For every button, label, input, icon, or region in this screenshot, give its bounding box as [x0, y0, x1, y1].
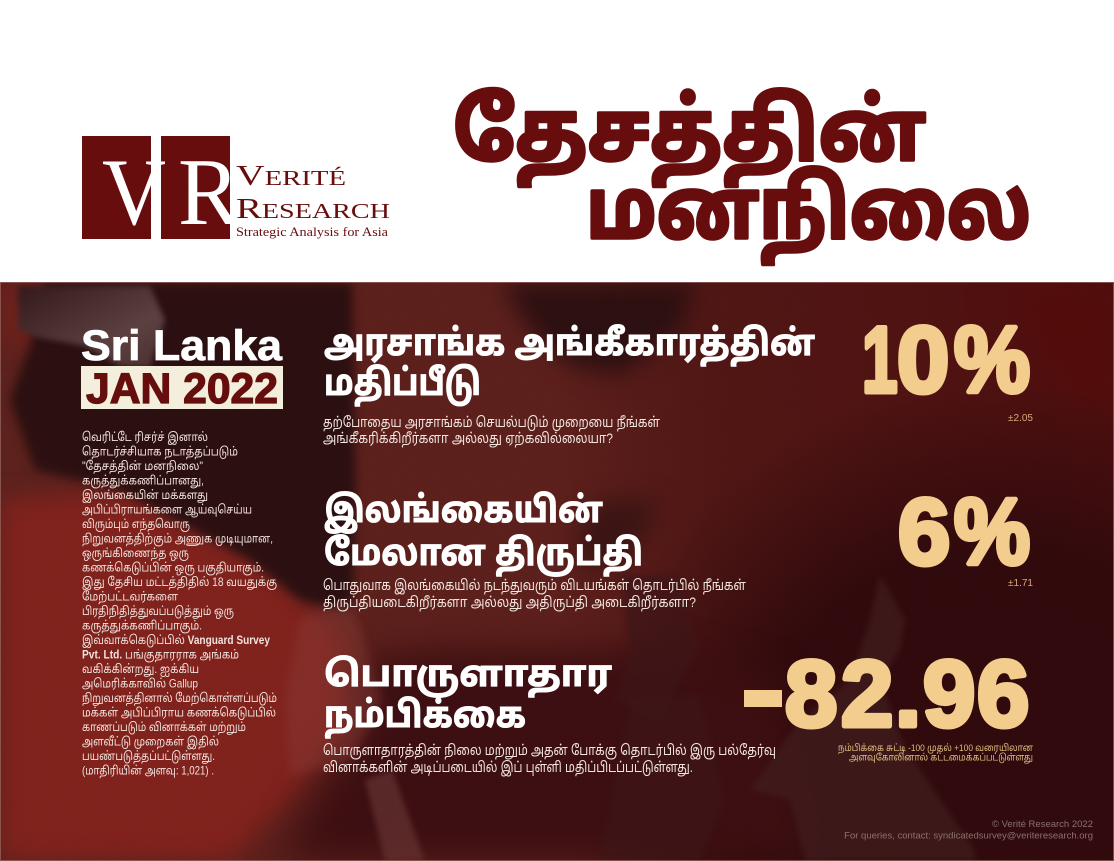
- text block: survey description: கருத்துக்கணிப்பாகும்.: [82, 618, 202, 634]
- heading: approval: [324, 322, 815, 406]
- text block: survey description: நிறுவனத்திற்கும் அணுக முடியுமான,: [82, 532, 273, 546]
- panel: overall satisfaction: [323, 479, 1033, 612]
- question text: approval: அங்கீகரிக்கிறீர்களா அல்லது ஏற்கவில்லையா?: [323, 430, 613, 448]
- heading: satisfaction: இலங்கையின்: [324, 489, 603, 534]
- text block: survey description: விரும்பும் எந்தவொரு: [82, 517, 190, 532]
- question text: approval: [323, 414, 660, 448]
- footer credits: © Verité Research 2022: [992, 819, 1093, 830]
- margin of error: 1.71: ±1.71: [1008, 578, 1033, 589]
- heading: confidence: [324, 653, 612, 739]
- question text: confidence: வினாக்களின் அடிப்படையில் இப் புள்ளி மதிப்பிடப்பட்டுள்ளது.: [323, 759, 693, 777]
- logo: Verité Research: V ERITÉ: [236, 160, 346, 192]
- logo: Verité Research: Strategic Analysis for Asia: [236, 224, 388, 239]
- text block: survey description: மக்கள் அபிப்பிராய கணக்கெடுப்பில்: [82, 706, 276, 720]
- logo: Verité Research: [82, 136, 390, 245]
- statistic: 6%: [898, 479, 1030, 585]
- text block: survey description: (மாதிரியின் அளவு: 1,021) .: [82, 764, 214, 778]
- background photo panel: [0, 282, 1114, 861]
- text block: survey description: நிறுவனத்தினால் மேற்கொள்ளப்படும்: [82, 691, 277, 706]
- statistic: 10%: 0: [897, 307, 949, 412]
- scale note: நம்பிக்கை சுட்டி -100 முதல் +100 வரையிலான: [838, 742, 1033, 754]
- statistic: 10%: [862, 307, 1030, 413]
- scale note: [838, 742, 1033, 764]
- scale note: அளவுகோலினால் கட்டமைக்கப்பட்டுள்ளது: [849, 752, 1033, 764]
- question text: confidence: பொருளாதாரத்தின் நிலை மற்றும் அதன் போக்கு தொடர்பில் இரு பல்தேர்வு: [323, 742, 776, 760]
- statistic: 10%: %: [954, 308, 1030, 413]
- text block: survey description: தொடர்ச்சியாக நடாத்தப்படும்: [82, 444, 238, 460]
- statistic: 10%: 1: [862, 308, 898, 413]
- heading: approval: மதிப்பீடு: [324, 362, 481, 406]
- statistic: 6%: 6: [898, 479, 950, 584]
- logo: Verité Research: R: [178, 139, 241, 245]
- panel: economic confidence: [323, 639, 1033, 777]
- text block: survey description: பிரதிநிதித்துவப்படுத்தும் ஒரு: [82, 604, 234, 619]
- logo: Verité Research: R ESEARCH: [236, 193, 390, 225]
- heading: confidence: பொருளாதார: [324, 653, 612, 698]
- title: மனநிலை: [586, 162, 1031, 265]
- text block: survey description: Pvt. Ltd. பங்குதாரராக அங்கம்: [82, 648, 239, 662]
- text block: survey description: மேற்பட்டவர்களை: [82, 590, 178, 604]
- logo: Verité Research: V: [102, 139, 166, 245]
- statistic: 6%: %: [954, 480, 1030, 585]
- text block: survey description: "தேசத்தின் மனநிலை": [82, 459, 203, 474]
- question text: satisfaction: பொதுவாக இலங்கையில் நடந்துவரும் விடயங்கள் தொடர்பில் நீங்கள்: [323, 577, 746, 595]
- text block: survey description: காணப்படும் வினாக்கள் மற்றும்: [82, 720, 246, 735]
- heading: approval: அரசாங்க அங்கீகாரத்தின்: [324, 322, 815, 366]
- text block: survey description: பயண்படுத்தப்பட்டுள்ளது.: [82, 749, 215, 764]
- footer credits: [844, 819, 1093, 842]
- heading: confidence: நம்பிக்கை: [324, 694, 526, 739]
- question text: satisfaction: [323, 577, 746, 612]
- text block: survey description: ஒருங்கிணைந்த ஒரு: [82, 546, 189, 561]
- date badge: JAN 2022: JAN 2022: [86, 365, 278, 413]
- title: [453, 84, 1031, 265]
- question text: approval: தற்போதைய அரசாங்கம் செயல்படும் முறையை நீங்கள்: [323, 414, 660, 432]
- statistic: -82.96: 82.96: [785, 641, 1029, 746]
- heading: satisfaction: [324, 489, 643, 577]
- panel: government approval: [323, 307, 1033, 448]
- heading: Sri Lanka: Sri Lanka: [81, 322, 283, 370]
- text block: survey description: அமெரிக்காவில் Gallup: [82, 676, 198, 690]
- text block: survey description: இலங்கையின் மக்களது: [82, 488, 208, 503]
- title: தேசத்தின்: [453, 84, 926, 187]
- text block: survey description: இது தேசிய மட்டத்திதில் 18 வயதுக்கு: [82, 575, 277, 590]
- text block: survey description: இவ்வாக்கெடுப்பில் Vanguard Survey: [82, 633, 270, 648]
- text block: survey description: வகிக்கின்றது. ஐக்கிய: [82, 662, 199, 677]
- text block: survey description: கருத்துக்கணிப்பானது,: [82, 474, 204, 488]
- statistic: -82.96: -: [752, 639, 783, 744]
- text block: survey description: கணக்கெடுப்பின் ஒரு பகுதியாகும்.: [82, 560, 264, 576]
- question text: satisfaction: திருப்தியடைகிறீர்களா அல்லது அதிருப்தி அடைகிறீர்களா?: [323, 594, 696, 612]
- text block: survey description: வெரிட்டே ரிசர்ச் இனால்: [82, 430, 208, 445]
- margin of error: 2.05: ±2.05: [1008, 413, 1033, 424]
- question text: confidence: [323, 742, 776, 777]
- footer credits: For queries, contact: syndicatedsurvey@veriteresearch.org: [844, 830, 1093, 842]
- text block: survey description: அளவீட்டு முறைகள் இதில்: [82, 734, 219, 750]
- text block: survey description: அபிப்பிராயங்களை ஆய்வுசெய்ய: [82, 502, 252, 518]
- text block: survey description: [82, 430, 277, 778]
- heading: satisfaction: மேலான திருப்தி: [324, 532, 643, 577]
